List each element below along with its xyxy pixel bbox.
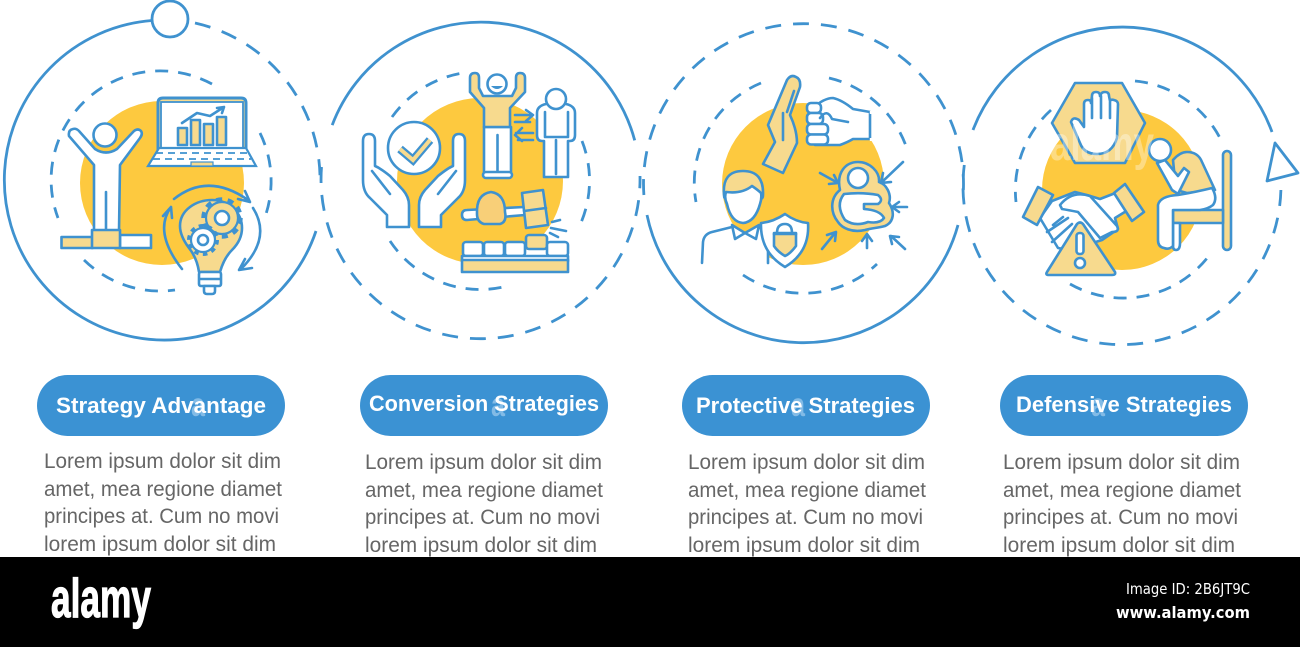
icon: fist [807, 98, 871, 145]
start marker circle [152, 1, 188, 37]
heading: strategy advantage pill: a [191, 386, 205, 423]
heading: protective strategies pill: Protective Strategies [696, 393, 915, 418]
text block: defensive strategies description: Lorem ipsum dolor sit dim [1003, 451, 1240, 474]
heading: defensive strategies pill [1000, 375, 1248, 436]
text block: strategy advantage description: principes at. Cum no movi [44, 505, 279, 528]
icon: shield with lock [761, 214, 808, 267]
panel: defensive strategies circle [963, 27, 1298, 345]
outer ring [4, 20, 320, 340]
heading: strategy advantage pill: Strategy Advantage [56, 393, 266, 418]
icon: raised palm [763, 76, 800, 173]
text block: conversion strategies description: amet, mea regione diamet [365, 479, 603, 502]
footer band [0, 557, 1300, 647]
icon: broken row of blocks [462, 235, 568, 272]
yellow disc [722, 103, 884, 265]
yellow disc [1042, 110, 1202, 270]
website: www.alamy.com [1116, 603, 1250, 622]
text block: defensive strategies description: amet, mea regione diamet [1003, 479, 1241, 502]
heading: protective strategies pill: a [791, 386, 805, 423]
text block: protective strategies description: lorem ipsum dolor sit dim [688, 534, 920, 557]
icon: warning triangle [1046, 222, 1115, 275]
icon: direction triangle [1267, 143, 1298, 181]
text block: protective strategies description: Lorem ipsum dolor sit dim [688, 451, 925, 474]
outer ring [963, 27, 1281, 345]
icon: winner on podium [62, 124, 151, 248]
image id: Image ID: 2B6JT9C [1126, 580, 1250, 598]
text block: strategy advantage description: lorem ipsum dolor sit dim [44, 533, 276, 556]
alamy logo: alamy [51, 567, 151, 629]
stock watermark: alamy [1050, 118, 1154, 171]
panel: conversion strategies circle [321, 22, 640, 339]
text block: conversion strategies description: principes at. Cum no movi [365, 506, 600, 529]
text block: protective strategies description [688, 451, 926, 557]
heading: protective strategies pill [682, 375, 930, 436]
icon: handshake [1023, 184, 1144, 250]
icon: stop hand on hexagon [1052, 83, 1145, 163]
outer ring [644, 24, 964, 343]
icon: hammer in fist [462, 190, 566, 237]
yellow disc [397, 98, 563, 264]
text block: strategy advantage description [44, 450, 282, 556]
panel: protective strategies circle [644, 24, 964, 343]
text block: strategy advantage description: Lorem ipsum dolor sit dim [44, 450, 281, 473]
outer ring [321, 22, 640, 339]
icon: man in suit [702, 171, 768, 263]
text block: conversion strategies description [365, 451, 603, 557]
text block: defensive strategies description: lorem ipsum dolor sit dim [1003, 534, 1235, 557]
yellow disc [80, 101, 244, 265]
icon: light bulb with gears [163, 186, 260, 294]
text block: defensive strategies description: principes at. Cum no movi [1003, 506, 1238, 529]
text block: protective strategies description: principes at. Cum no movi [688, 506, 923, 529]
text block: defensive strategies description [1003, 451, 1241, 557]
icon: happy and sad persons exchanging [470, 73, 575, 178]
icon: protected baby with arrows [820, 162, 907, 249]
icon: thinking person on chair [1149, 139, 1231, 250]
panel: strategy advantage circle [4, 1, 320, 340]
heading: conversion strategies pill: Conversion Strategies [369, 391, 599, 416]
text block: strategy advantage description: amet, mea regione diamet [44, 478, 282, 501]
heading: defensive strategies pill: Defensive Strategies [1016, 392, 1232, 417]
text block: protective strategies description: amet, mea regione diamet [688, 479, 926, 502]
heading: conversion strategies pill: a [491, 386, 505, 423]
icon: laptop with chart [148, 98, 256, 166]
heading: defensive strategies pill: a [1091, 386, 1105, 423]
heading: conversion strategies pill [360, 375, 608, 436]
icon: hands holding check mark [363, 122, 465, 227]
text block: conversion strategies description: lorem ipsum dolor sit dim [365, 534, 597, 557]
heading: strategy advantage pill [37, 375, 285, 436]
text block: conversion strategies description: Lorem ipsum dolor sit dim [365, 451, 602, 474]
